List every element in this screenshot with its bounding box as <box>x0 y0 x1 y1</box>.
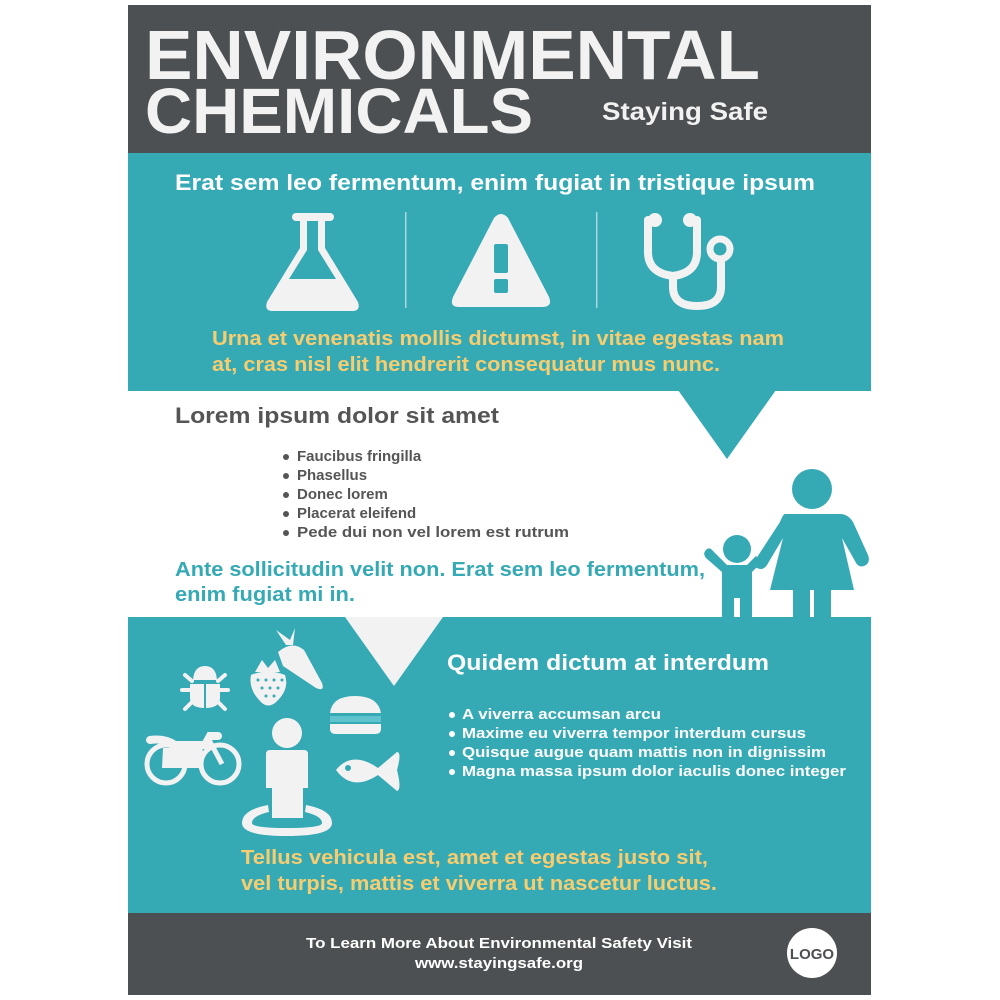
icon: burger <box>330 696 381 734</box>
bullet list: Quisque augue quam mattis non in dignissim <box>462 744 826 761</box>
divider <box>405 212 406 308</box>
title: CHEMICALS <box>145 75 533 147</box>
teal text <box>175 559 705 606</box>
footer text <box>306 935 692 972</box>
bullet list: Placerat eleifend <box>297 505 416 522</box>
teal text: Ante sollicitudin velit non. Erat sem leo fermentum, <box>175 559 705 581</box>
bullet list: Donec lorem <box>297 486 388 503</box>
header panel <box>128 5 871 153</box>
heading: Erat sem leo fermentum, enim fugiat in tristique ipsum <box>175 170 815 195</box>
subtitle: Staying Safe <box>602 98 768 126</box>
yellow text: at, cras nisl elit hendrerit consequatur mus nunc. <box>212 354 720 376</box>
bullet list <box>283 448 569 541</box>
arrow: teal pointer down <box>678 390 776 459</box>
title <box>145 16 760 147</box>
heading: quidem: Quidem dictum at interdum <box>447 650 769 675</box>
bullet list: Faucibus fringilla <box>297 448 422 465</box>
divider <box>596 212 598 308</box>
icon: fish <box>336 752 400 791</box>
logo <box>787 928 837 978</box>
icon: person with ring <box>242 718 332 836</box>
icon: flask <box>266 213 359 311</box>
bullet list <box>449 706 846 780</box>
icon: mother and child <box>704 469 869 617</box>
yellow text: Tellus vehicula est, amet et egestas justo sit, <box>241 847 708 869</box>
icon: stethoscope <box>648 216 730 306</box>
heading: lorem ipsum: Lorem ipsum dolor sit amet <box>175 403 500 428</box>
yellow text <box>212 328 784 376</box>
teal text: enim fugiat mi in. <box>175 584 355 606</box>
footer <box>128 913 871 995</box>
bullet list: Maxime eu viverra tempor interdum cursus <box>462 725 806 742</box>
icon: bug <box>182 666 228 709</box>
bullet list: Phasellus <box>297 467 367 484</box>
icon: strawberry and carrot <box>250 628 323 706</box>
bullet list: A viverra accumsan arcu <box>462 706 661 723</box>
title: ENVIRONMENTAL <box>145 16 760 94</box>
yellow text: Urna et venenatis mollis dictumst, in vitae egestas nam <box>212 328 784 350</box>
bullet list: Magna massa ipsum dolor iaculis donec integer <box>462 763 846 780</box>
yellow text <box>241 847 717 895</box>
panel: top teal section <box>128 153 871 391</box>
logo: LOGO <box>790 946 834 963</box>
arrow: white pointer <box>345 617 443 686</box>
footer text: To Learn More About Environmental Safety Visit <box>306 935 692 952</box>
icon: warning <box>452 214 550 307</box>
footer text: www.stayingsafe.org <box>414 955 583 972</box>
bullet list: Pede dui non vel lorem est rutrum <box>297 524 569 541</box>
yellow text: vel turpis, mattis et viverra ut nascetur luctus. <box>241 873 717 895</box>
icon: motorbike <box>147 736 239 783</box>
panel: bottom teal section <box>128 617 871 913</box>
